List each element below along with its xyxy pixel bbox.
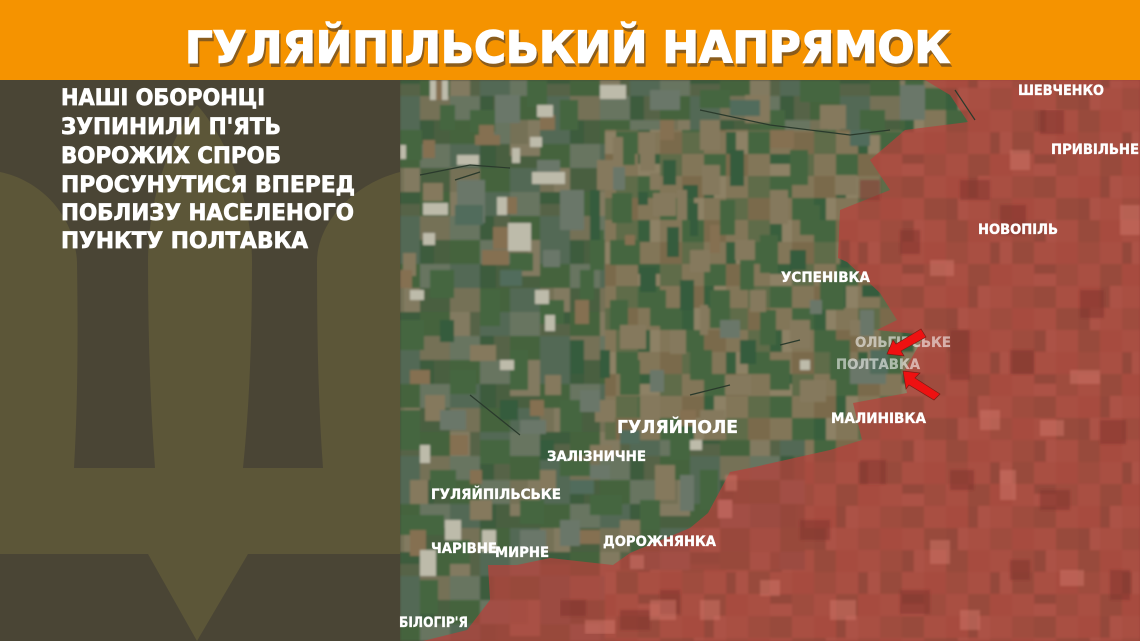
label: Білогір'я: БІЛОГІР'Я xyxy=(399,615,468,631)
title: ГУЛЯЙПІЛЬСЬКИЙ НАПРЯМОК xyxy=(186,24,952,77)
text block: main message: ВОРОЖИХ СПРОБ xyxy=(61,144,281,169)
label: Гуляйполе: ГУЛЯЙПОЛЕ xyxy=(617,416,738,438)
text block: main message: ПРОСУНУТИСЯ ВПЕРЕД xyxy=(61,173,355,198)
panel: left text panel xyxy=(0,80,400,641)
occupied territory overlay xyxy=(423,80,1140,641)
label: Малинівка: МАЛИНІВКА xyxy=(831,411,926,427)
green fields xyxy=(400,80,885,614)
brown fields xyxy=(400,80,794,556)
label: Полтавка: ПОЛТАВКА xyxy=(836,357,920,373)
label: Гуляйпільське: ГУЛЯЙПІЛЬСЬКЕ xyxy=(431,486,561,503)
occupied field shading xyxy=(560,110,1140,634)
map labels xyxy=(399,83,1139,631)
arrow: attack toward Полтавка xyxy=(903,371,940,400)
text block: main message xyxy=(61,86,355,254)
label: Дорожнянка: ДОРОЖНЯНКА xyxy=(603,534,716,550)
label: Залізничне: ЗАЛІЗНИЧНЕ xyxy=(547,449,646,465)
header bar xyxy=(0,0,1140,80)
arrow: attack toward Ольгівське xyxy=(887,329,926,356)
label: Чарівне: ЧАРІВНЕ xyxy=(431,541,497,557)
text block: main message: НАШІ ОБОРОНЦІ xyxy=(61,86,265,111)
text block: main message: ПУНКТУ ПОЛТАВКА xyxy=(61,229,308,254)
label: Ольгівське: ОЛЬГІВСЬКЕ xyxy=(855,335,951,351)
label: Новопіль: НОВОПІЛЬ xyxy=(978,222,1058,238)
teal patches xyxy=(455,100,888,494)
creek lines xyxy=(420,90,975,435)
title: ГУЛЯЙПІЛЬСЬКИЙ НАПРЯМОК xyxy=(185,20,950,74)
icon: trident watermark xyxy=(0,105,400,641)
grey fields xyxy=(440,85,925,554)
map: satellite view xyxy=(399,80,1140,641)
text block: main message: ПОБЛИЗУ НАСЕЛЕНОГО xyxy=(61,201,354,226)
satellite dimming xyxy=(400,80,1140,641)
dark green fields xyxy=(440,150,880,460)
pale fields xyxy=(400,80,810,576)
label: Успенівка: УСПЕНІВКА xyxy=(781,270,870,286)
label: Мирне: МИРНЕ xyxy=(495,545,549,561)
tan fields xyxy=(403,95,866,536)
label: Шевченко: ШЕВЧЕНКО xyxy=(1018,83,1104,99)
text block: main message: ЗУПИНИЛИ П'ЯТЬ xyxy=(61,115,281,140)
